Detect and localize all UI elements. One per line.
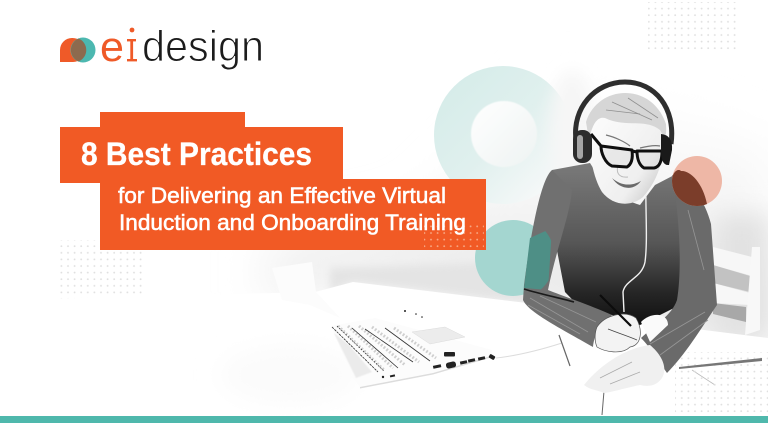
heading: 8 Best Practices	[81, 136, 312, 172]
banner shape	[60, 112, 486, 250]
hair	[586, 93, 666, 140]
table shadow	[220, 345, 360, 405]
logo	[60, 22, 264, 71]
hand: writing	[595, 295, 640, 352]
keyboard key rows	[338, 326, 436, 370]
hand: front	[584, 345, 664, 393]
subheading: for Delivering an Effective Virtual	[118, 183, 446, 208]
teal circle decoration	[475, 220, 551, 296]
laptop base	[331, 318, 492, 387]
dot pattern: top right	[648, 2, 736, 52]
bottom teal bar	[0, 416, 768, 423]
subheading	[118, 183, 466, 235]
laptop screen	[272, 262, 340, 318]
paper bump	[641, 315, 668, 342]
cable	[623, 172, 646, 312]
logo text: i	[127, 28, 137, 61]
ruler	[679, 358, 762, 369]
chair	[713, 247, 760, 335]
logo text: e: e	[100, 23, 124, 70]
right arm	[641, 175, 717, 373]
laptop	[272, 262, 496, 388]
person	[523, 82, 762, 393]
laptop cable	[496, 343, 562, 358]
glasses	[591, 134, 662, 168]
shading and smile	[606, 135, 660, 188]
trackpad	[412, 327, 465, 344]
teal ring decoration	[434, 66, 594, 204]
paper and pen lines on table	[559, 335, 715, 415]
dot pattern: left	[58, 240, 146, 320]
torso	[552, 163, 700, 325]
subheading: Induction and Onboarding Training	[119, 210, 466, 235]
headphones	[573, 82, 672, 165]
laptop ports	[382, 310, 496, 378]
keyboard rows	[332, 326, 430, 372]
logo text: design: design	[142, 22, 264, 71]
title banner	[60, 112, 486, 250]
dot pattern: bottom right	[675, 352, 768, 416]
orange circle decoration	[672, 156, 722, 206]
left arm	[523, 170, 612, 347]
table	[0, 282, 768, 423]
logo mark	[60, 38, 96, 62]
wall backdrop	[270, 80, 768, 345]
face	[588, 98, 664, 204]
banner dots	[424, 222, 484, 248]
